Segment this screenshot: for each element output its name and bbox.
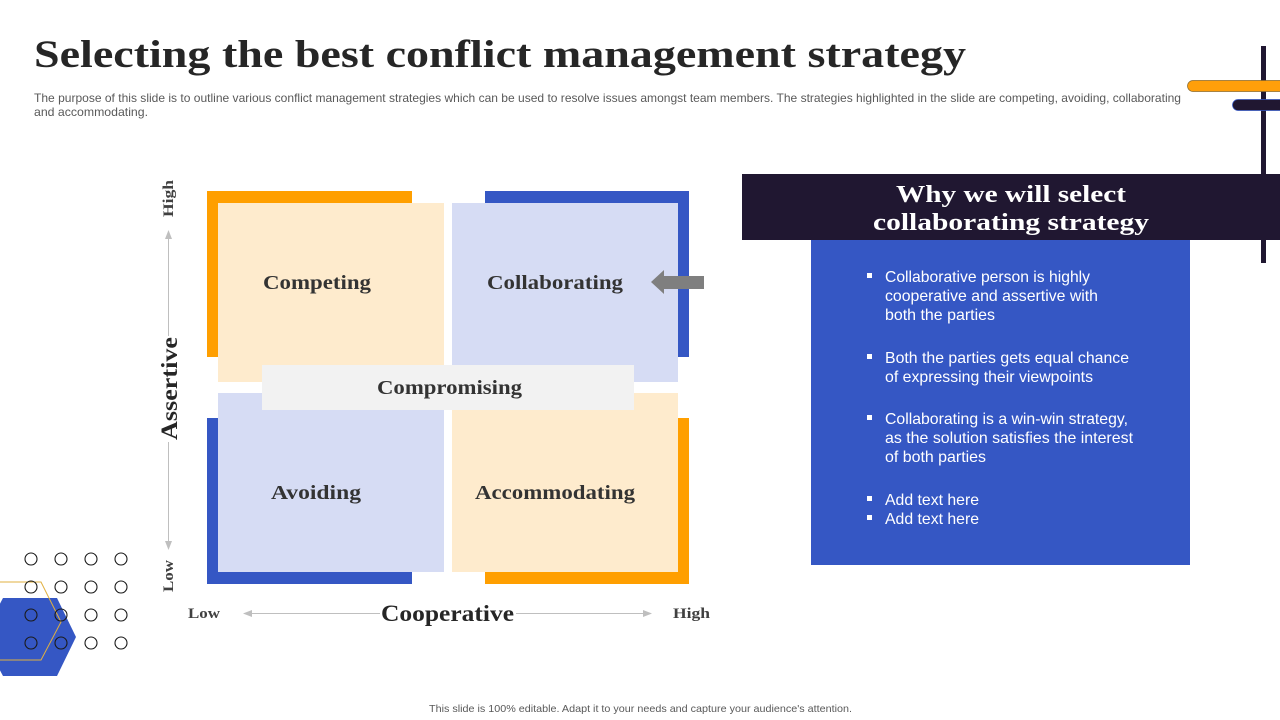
- intro text: [34, 91, 1181, 119]
- frame: competing: [207, 191, 412, 357]
- frame: collaborating: [485, 191, 689, 357]
- bullet list: Add text here: [885, 492, 979, 509]
- label: avoiding: Avoiding: [271, 482, 361, 504]
- label: compromising: Compromising: [377, 377, 522, 399]
- axis label: low: Low: [188, 606, 220, 622]
- intro text: and accommodating.: [34, 105, 148, 119]
- card: accommodating: [452, 393, 678, 572]
- panel heading: collaborating strategy: [873, 210, 1149, 236]
- bullet list: Collaborating is a win-win strategy,: [885, 411, 1128, 428]
- bullet list: as the solution satisfies the interest: [885, 430, 1134, 447]
- panel body: [811, 240, 1190, 565]
- panel header: [742, 174, 1280, 240]
- axis label: assertive: Assertive: [157, 337, 182, 440]
- card: collaborating: [452, 203, 678, 382]
- bullet list: [867, 269, 1134, 528]
- decoration: top right bars: [1188, 46, 1280, 263]
- panel heading: Why we will select: [896, 182, 1126, 208]
- label: accommodating: Accommodating: [475, 482, 635, 504]
- axis label: high: High: [673, 606, 711, 622]
- card: avoiding: [218, 393, 444, 572]
- card: compromising: [262, 365, 634, 410]
- axis arrow: cooperative: [243, 610, 652, 617]
- card: competing: [218, 203, 444, 382]
- bullet list: of both parties: [885, 449, 986, 466]
- frame: avoiding: [207, 418, 412, 584]
- footer note: This slide is 100% editable. Adapt it to your needs and capture your audience's attention.: [429, 703, 852, 715]
- axis label: low: Low: [161, 560, 177, 592]
- vertical axis: [157, 179, 182, 592]
- label: competing: Competing: [263, 272, 371, 294]
- axis arrow: assertive: [165, 230, 172, 550]
- title: Selecting the best conflict management strategy: [34, 33, 967, 76]
- label: collaborating: Collaborating: [487, 272, 623, 294]
- bullet list: cooperative and assertive with: [885, 288, 1098, 305]
- bullet list: Both the parties gets equal chance: [885, 350, 1129, 367]
- bullet list: Add text here: [885, 511, 979, 528]
- horizontal axis: [188, 601, 711, 626]
- panel: why collaborating: [742, 174, 1280, 565]
- bullet list: of expressing their viewpoints: [885, 369, 1093, 386]
- axis label: high: High: [161, 179, 177, 217]
- bullet list: Collaborative person is highly: [885, 269, 1090, 286]
- intro text: The purpose of this slide is to outline various conflict management strategies which can be used to resolve issues amongst team members. The strategies highlighted in the slide are competing, avoiding, collaborating: [34, 91, 1181, 105]
- axis label: cooperative: Cooperative: [381, 601, 514, 626]
- panel heading: [873, 182, 1149, 236]
- frame: accommodating: [485, 418, 689, 584]
- arrow: pointing to collaborating: [651, 270, 704, 294]
- quadrant matrix: [207, 191, 689, 584]
- bullet list: both the parties: [885, 307, 995, 324]
- decoration: hexagon and dots: [0, 553, 127, 676]
